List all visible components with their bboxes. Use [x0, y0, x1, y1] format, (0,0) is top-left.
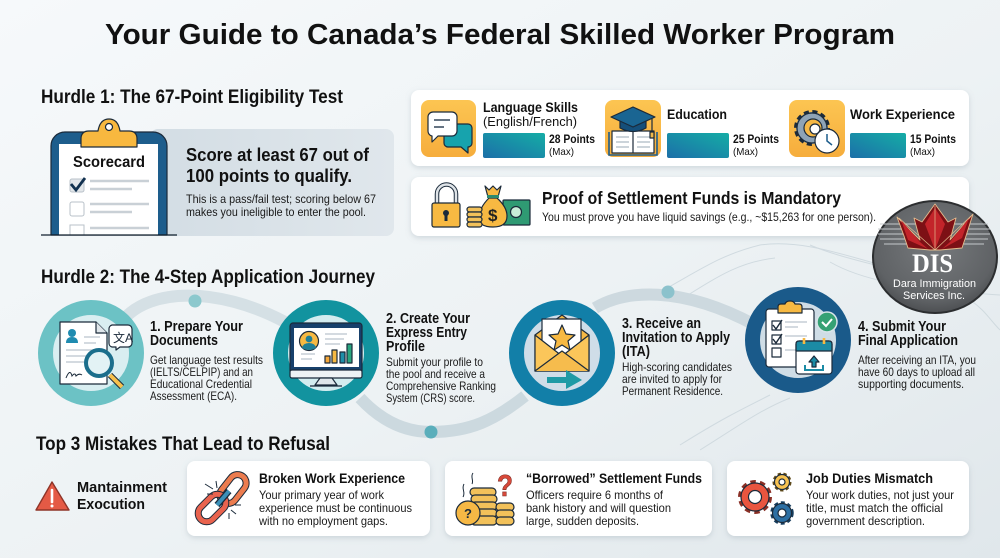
step 2	[280, 308, 496, 405]
step 3 body: are invited to apply for	[622, 372, 722, 386]
card: broken work experience: Broken Work Experience	[259, 471, 405, 486]
step 3 heading: (ITA)	[622, 344, 650, 360]
card: job duties mismatch: title, must match the official	[806, 501, 943, 515]
work experience: 15 Points	[910, 132, 956, 146]
step 2 heading: Profile	[386, 339, 425, 355]
icon: speech bubbles	[421, 100, 476, 157]
icon: scorecard clipboard	[41, 119, 177, 235]
step 4 body	[858, 353, 976, 391]
journey path	[125, 286, 755, 438]
step 2 heading: 2. Create Your	[386, 311, 470, 327]
work experience: Work Experience	[850, 107, 955, 122]
step 4 heading: Final Application	[858, 333, 958, 349]
heading: top 3 mistakes: Top 3 Mistakes That Lead to Refusal	[36, 434, 330, 455]
step 1	[46, 308, 263, 403]
card: broken work experience: experience must be continuous	[259, 501, 412, 515]
icon: coins with question marks	[456, 468, 514, 525]
step 4 body: After receiving an ITA, you	[858, 353, 976, 367]
card: borrowed settlement funds: Officers require 6 months of	[526, 488, 664, 502]
step 1 heading: 1. Prepare Your	[150, 319, 243, 335]
step 2 body: System (CRS) score.	[386, 391, 475, 405]
step 3 heading	[622, 316, 730, 360]
language skills: Language Skills	[483, 100, 578, 115]
icon: warning triangle	[36, 482, 69, 510]
card: borrowed settlement funds	[445, 461, 712, 536]
step 2 body: the pool and receive a	[386, 367, 485, 381]
score description	[186, 192, 376, 219]
bar: 28 points	[483, 133, 545, 158]
card: job duties mismatch	[727, 461, 969, 536]
icon: coins with question marks: ?	[464, 506, 472, 521]
logo: Dara Immigration Services: DIS	[912, 249, 953, 278]
step 1 body	[150, 353, 263, 403]
maintainment callout: Mantainment	[77, 479, 167, 496]
work experience	[789, 100, 956, 158]
step 1 heading	[150, 319, 243, 349]
logo: Dara Immigration Services: Dara Immigration	[893, 278, 976, 290]
icon: gears	[741, 474, 792, 522]
icon: checklist and calendar	[752, 294, 844, 386]
language skills: 28 Points	[549, 132, 595, 146]
icon: padlock	[432, 184, 460, 227]
score headline: Score at least 67 out of	[186, 144, 370, 165]
step 4 body: supporting documents.	[858, 377, 964, 391]
step 2 body	[386, 355, 496, 405]
icon: envelope with star	[516, 308, 608, 398]
icon: documents and magnifier: 文A	[113, 330, 133, 345]
icon: scorecard clipboard: Scorecard	[73, 154, 145, 171]
panel: points categories	[411, 90, 969, 166]
panel: settlement funds: Proof of Settlement Funds is Mandatory	[542, 188, 841, 208]
card: job duties mismatch: Your work duties, not just your	[806, 488, 954, 502]
step 1 body: Get language test results	[150, 353, 263, 367]
icon: money bag and coins	[467, 186, 530, 227]
step 1 body: (IELTS/CELPIP) and an	[150, 365, 253, 379]
step 2 heading	[386, 311, 470, 355]
step 1 body: Educational Credential	[150, 377, 252, 391]
step 3	[516, 308, 732, 398]
step 3 body	[622, 360, 732, 398]
education: 25 Points	[733, 132, 779, 146]
step 4 heading	[858, 319, 958, 349]
icon: broken chain	[195, 471, 250, 525]
work experience: (Max)	[910, 146, 935, 158]
score description: makes you ineligible to enter the pool.	[186, 205, 366, 219]
card: job duties mismatch: Job Duties Mismatch	[806, 471, 933, 486]
maintainment callout	[36, 479, 167, 513]
panel: settlement funds: You must prove you have liquid savings (e.g., ~$15,263 for one person).	[542, 210, 876, 224]
step 4 heading: 4. Submit Your	[858, 319, 946, 335]
icon: money bag and coins: $	[488, 206, 498, 225]
maintainment callout: Exocution	[77, 496, 145, 513]
card: borrowed settlement funds: large, sudden deposits.	[526, 514, 639, 528]
icon: documents and magnifier	[46, 308, 136, 398]
card: borrowed settlement funds: “Borrowed” Settlement Funds	[526, 471, 702, 486]
step 3 body: High-scoring candidates	[622, 360, 732, 374]
panel: settlement funds	[411, 177, 969, 236]
education: Education	[667, 107, 727, 122]
bar: 25 points	[667, 133, 729, 158]
language skills: (English/French)	[483, 114, 577, 129]
card: job duties mismatch: government description.	[806, 514, 925, 528]
step 4	[752, 294, 976, 391]
card: broken work experience	[187, 461, 430, 536]
card: broken work experience: Your primary year of work	[259, 488, 385, 502]
step 1 heading: Documents	[150, 333, 218, 349]
step 3 heading: 3. Receive an	[622, 316, 701, 332]
icon: gear and clock	[789, 100, 845, 157]
title: Your Guide to Canada’s Federal Skilled Worker Program	[105, 19, 895, 51]
panel: eligibility score	[41, 119, 394, 236]
language skills	[421, 100, 595, 158]
heading: hurdle 1: Hurdle 1: The 67-Point Eligibility Test	[41, 87, 344, 108]
score headline	[186, 144, 370, 186]
step 4 body: have 60 days to upload all	[858, 365, 975, 379]
step 2 body: Submit your profile to	[386, 355, 483, 369]
icon: graduation cap and book	[605, 100, 661, 157]
score description: This is a pass/fail test; scoring below 67	[186, 192, 376, 206]
decorative flow lines	[660, 244, 1000, 450]
language skills: (Max)	[549, 146, 574, 158]
logo: Dara Immigration Services: Services Inc.	[903, 290, 965, 302]
step 1 body: Assessment (ECA).	[150, 389, 237, 403]
step 3 body: Permanent Residence.	[622, 384, 723, 398]
icon: computer profile	[280, 308, 372, 398]
step 2 heading: Express Entry	[386, 325, 467, 341]
step 2 body: Comprehensive Ranking	[386, 379, 496, 393]
step 3 heading: Invitation to Apply	[622, 330, 730, 346]
education	[605, 100, 779, 158]
icon: coins with question marks: ?	[497, 468, 513, 503]
bar: 15 points	[850, 133, 906, 158]
logo: Dara Immigration Services	[873, 201, 997, 313]
card: broken work experience: with no employment gaps.	[258, 514, 388, 528]
education: (Max)	[733, 146, 758, 158]
card: borrowed settlement funds: bank history and will question	[526, 501, 671, 515]
heading: hurdle 2: Hurdle 2: The 4-Step Application Journey	[41, 267, 375, 288]
score headline: 100 points to qualify.	[186, 165, 352, 186]
